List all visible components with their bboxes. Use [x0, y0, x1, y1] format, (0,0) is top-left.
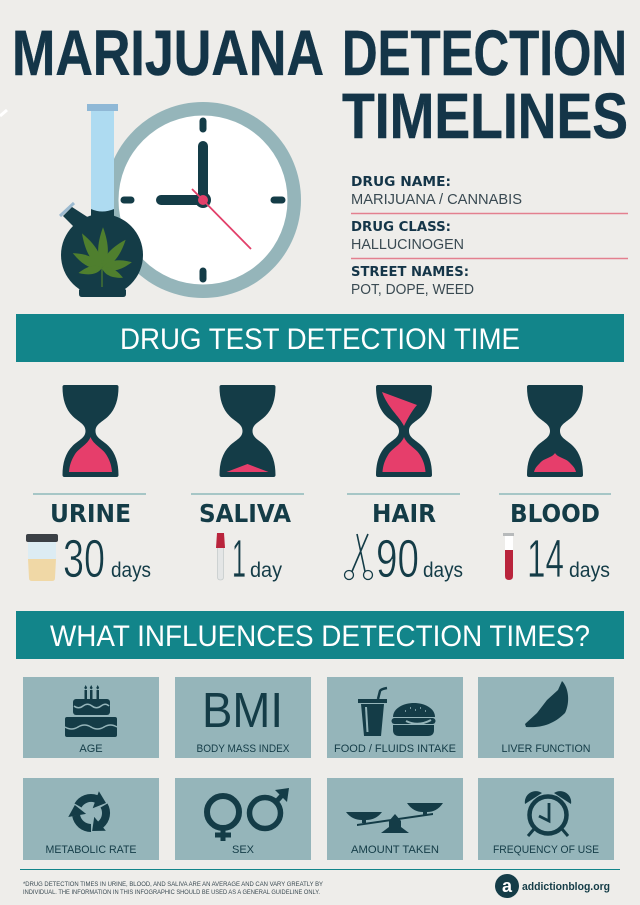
footnote: INDIVIDUAL. THE INFORMATION IN THIS INFOGRAPHIC SHOULD BE USED AS A GENERAL GUIDELINE ONLY. — [23, 890, 320, 896]
panel: food and fluids intake: FOOD / FLUIDS INTAKE — [334, 743, 456, 755]
panel: hair — [344, 385, 463, 589]
panel: body mass index: BODY MASS INDEX — [196, 743, 290, 755]
panel: blood — [499, 385, 611, 589]
drug info: HALLUCINOGEN — [351, 237, 464, 253]
drug info: DRUG NAME: — [351, 174, 451, 190]
panel: hair: HAIR — [372, 499, 436, 528]
panel: food and fluids intake — [327, 677, 463, 758]
panel: urine: URINE — [50, 499, 131, 528]
panel: hair: 90 — [376, 529, 419, 589]
panel: blood: BLOOD — [510, 499, 600, 528]
panel: body mass index — [175, 677, 311, 758]
panel: sex — [175, 778, 311, 860]
panel: amount taken: AMOUNT TAKEN — [351, 844, 439, 856]
panel: body mass index: BMI — [202, 684, 283, 738]
drug info: POT, DOPE, WEED — [351, 282, 474, 298]
panel: frequency of use — [478, 778, 614, 860]
panel: amount taken — [327, 778, 463, 860]
drug info: STREET NAMES: — [351, 264, 469, 280]
drug info — [351, 174, 628, 298]
panel: metabolic rate — [23, 778, 159, 860]
panel: age — [23, 677, 159, 758]
icon: bong with cannabis leaf — [60, 104, 143, 297]
title: MARIJUANA — [12, 17, 324, 89]
banner: drug test detection time — [16, 314, 624, 362]
panel: saliva — [191, 385, 304, 589]
panel: sex: SEX — [232, 844, 255, 856]
drug info: DRUG CLASS: — [351, 219, 451, 235]
panel: saliva: SALIVA — [199, 499, 292, 528]
drug info: MARIJUANA / CANNABIS — [351, 192, 522, 208]
logo: addictionblog.org: addictionblog.org — [522, 881, 610, 893]
title — [12, 17, 628, 152]
logo: addictionblog.org: a — [502, 876, 513, 896]
logo: addictionblog.org — [495, 874, 610, 898]
panel: frequency of use: FREQUENCY OF USE — [493, 844, 599, 856]
footnote — [23, 882, 323, 896]
panel: saliva: day — [250, 559, 282, 582]
panel: saliva: 1 — [232, 529, 246, 589]
banner: what influences detection times: WHAT INFLUENCES DETECTION TIMES? — [50, 620, 590, 653]
panel: blood: days — [569, 559, 610, 582]
banner: drug test detection time: DRUG TEST DETECTION TIME — [120, 323, 520, 356]
icon: clock — [105, 102, 301, 298]
panel: blood: 14 — [527, 529, 564, 589]
banner: what influences detection times — [16, 611, 624, 659]
panel: liver function — [478, 677, 614, 758]
panel: metabolic rate: METABOLIC RATE — [46, 844, 136, 856]
panel: urine: days — [111, 559, 151, 582]
footnote: *DRUG DETECTION TIMES IN URINE, BLOOD, AND SALIVA ARE AN AVERAGE AND CAN VARY GREATLY BY — [23, 882, 323, 888]
panel: urine — [26, 385, 151, 589]
panel: liver function: LIVER FUNCTION — [502, 743, 591, 755]
panel: hair: days — [423, 559, 463, 582]
panel: age: AGE — [79, 743, 103, 755]
panel: urine: 30 — [63, 529, 105, 589]
